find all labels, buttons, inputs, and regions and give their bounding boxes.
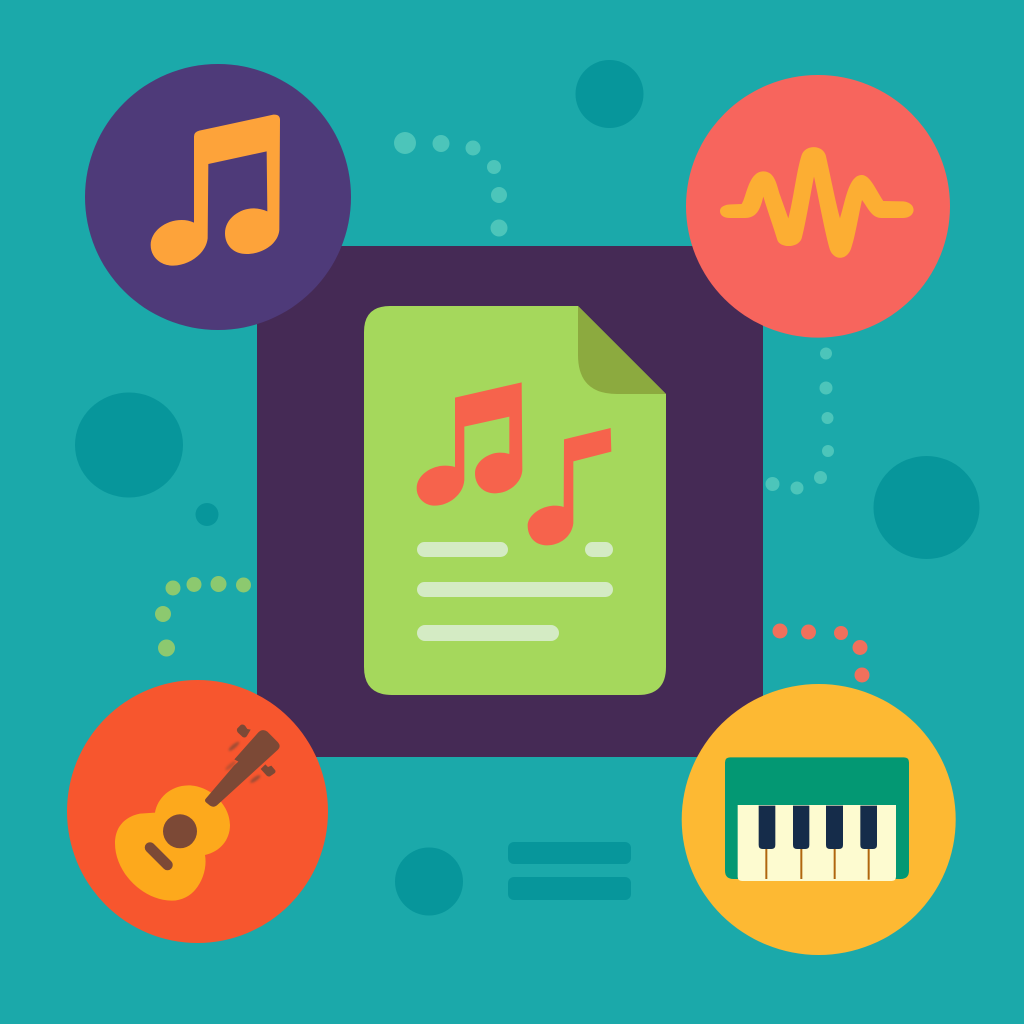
document page bbox=[364, 306, 666, 695]
badge: piano bbox=[682, 684, 956, 955]
text placeholder lines bbox=[417, 542, 613, 641]
purple circle bbox=[85, 64, 351, 330]
blurred peg shadows bbox=[224, 741, 261, 784]
dotted connector: bottom right bbox=[772, 624, 870, 682]
double music note bbox=[417, 382, 522, 506]
document bbox=[364, 306, 666, 695]
guitar neck and pegs bbox=[205, 724, 280, 807]
dotted connector: top bbox=[394, 132, 508, 236]
dotted connector: left bbox=[155, 576, 251, 656]
bridge bbox=[150, 848, 168, 865]
icon: keyboard bbox=[725, 757, 909, 881]
page fold bbox=[578, 306, 666, 394]
dotted connector: right bbox=[766, 348, 834, 494]
badge: sound wave bbox=[686, 75, 950, 338]
coral circle bbox=[686, 75, 950, 338]
badge: guitar bbox=[67, 680, 328, 943]
orange-red circle bbox=[67, 680, 328, 943]
key dividers bbox=[766, 848, 869, 880]
black keys bbox=[759, 806, 877, 849]
icon: waveform bbox=[720, 147, 914, 258]
keyboard case bbox=[725, 757, 909, 879]
central dark panel bbox=[257, 246, 763, 757]
icon: orange music note bbox=[151, 115, 280, 266]
tuning pegs bbox=[237, 724, 275, 777]
white keys bbox=[738, 805, 896, 881]
decorative dark teal bars bbox=[508, 842, 631, 900]
badge: music note bbox=[85, 64, 351, 330]
guitar neck bbox=[205, 730, 280, 807]
guitar body bbox=[115, 785, 230, 901]
yellow circle bbox=[682, 684, 956, 955]
icon: guitar bbox=[115, 724, 280, 901]
decorative dark teal circles bbox=[75, 60, 980, 916]
single music note bbox=[528, 428, 611, 545]
sound hole bbox=[163, 814, 197, 848]
